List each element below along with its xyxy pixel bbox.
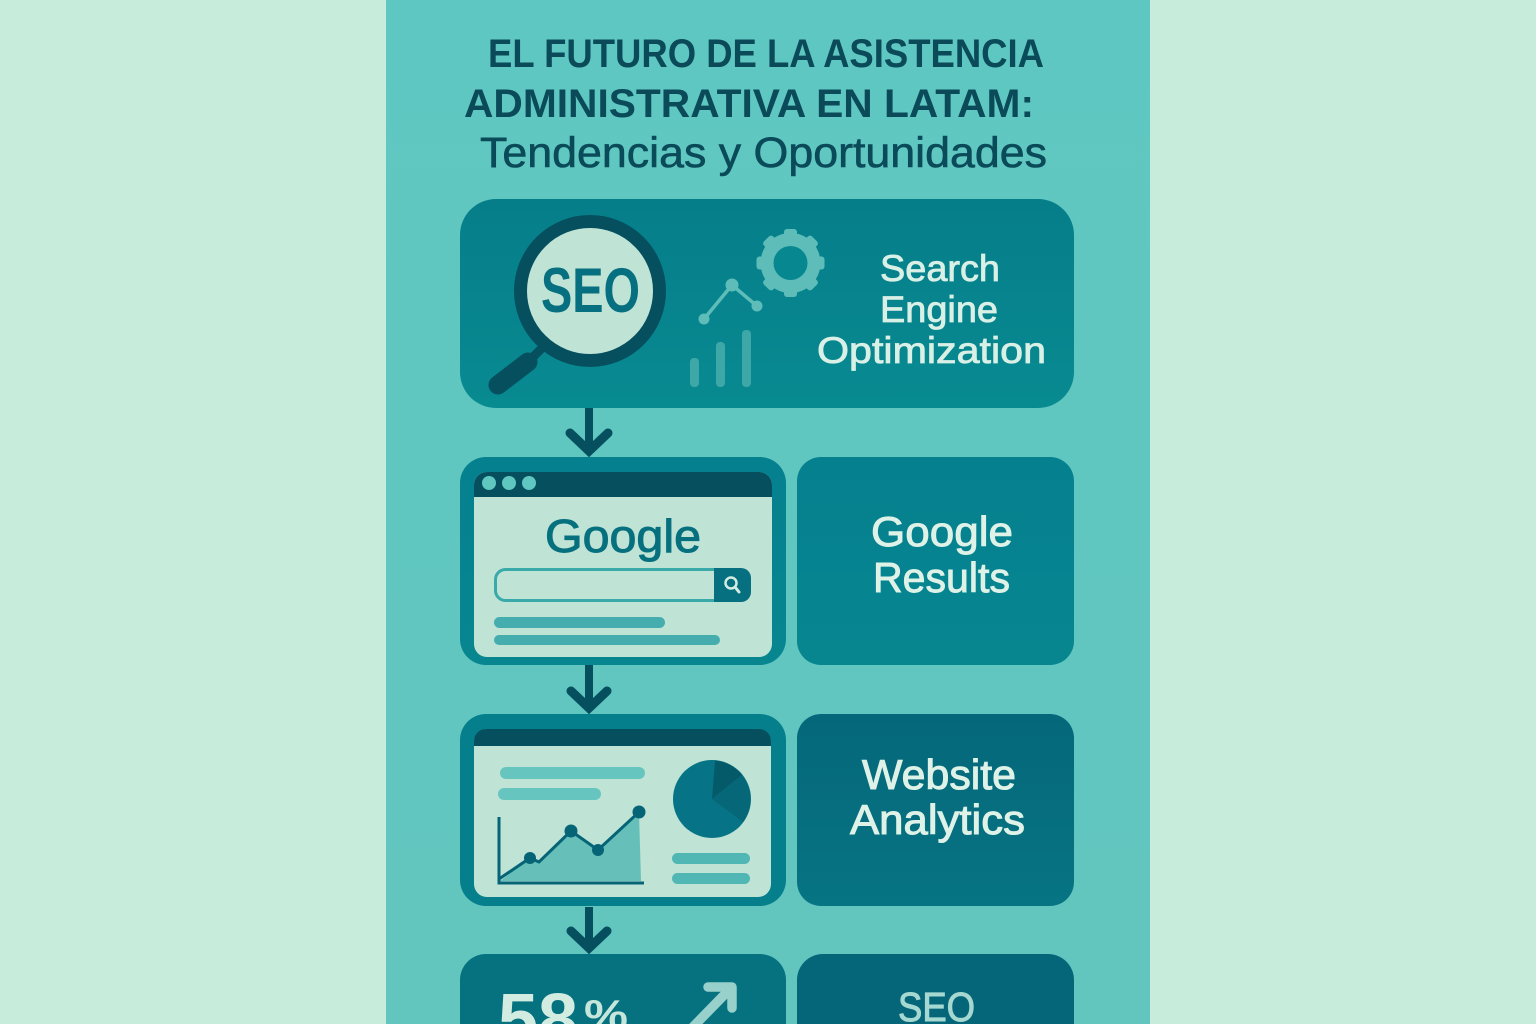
title: Tendencias y Oportunidades [480,129,1047,177]
panel: Website Analytics: Website [862,751,1016,798]
title: EL FUTURO DE LA ASISTENCIA [488,32,1044,76]
panel: Google Results: Google [871,508,1013,555]
panel: Website Analytics [797,714,1074,906]
panel: Google window [460,457,786,665]
label: Search Engine Optimization [817,248,1046,371]
panel: analytics window [460,714,786,906]
label: Search Engine Optimization: Engine [880,289,998,330]
icon: magnifying glass: SEO [541,256,640,326]
central panel [386,0,1150,1024]
icon: line graph [699,279,762,324]
label: Search Engine Optimization: Search [880,248,1000,289]
result lines [494,617,720,645]
legend lines [672,853,750,884]
title: ADMINISTRATIVA EN LATAM: [464,82,1034,126]
panel: Website Analytics: Analytics [850,796,1025,843]
panel: 58 percent stat [460,954,786,1024]
arrow 2 [571,665,607,708]
pie chart [673,760,751,838]
label: Search Engine Optimization: Optimization [817,330,1046,371]
panel: SEO label [797,954,1074,1024]
panel: SEO [460,199,1074,408]
title [464,32,1047,177]
Google logo text: Google [545,510,701,562]
panel: Google Results: Results [873,554,1010,601]
arrow 3 [571,907,607,948]
arrow 1 [570,408,608,451]
window title bar [474,729,771,746]
icon: gear [756,229,824,297]
text lines [498,767,645,800]
line chart [499,806,646,883]
search bar [496,568,751,602]
icon: magnifying glass [498,222,660,385]
icon: up arrow [688,987,732,1024]
icon: bars [690,330,751,387]
panel: Google Results [797,457,1074,665]
window title bar [474,472,772,497]
